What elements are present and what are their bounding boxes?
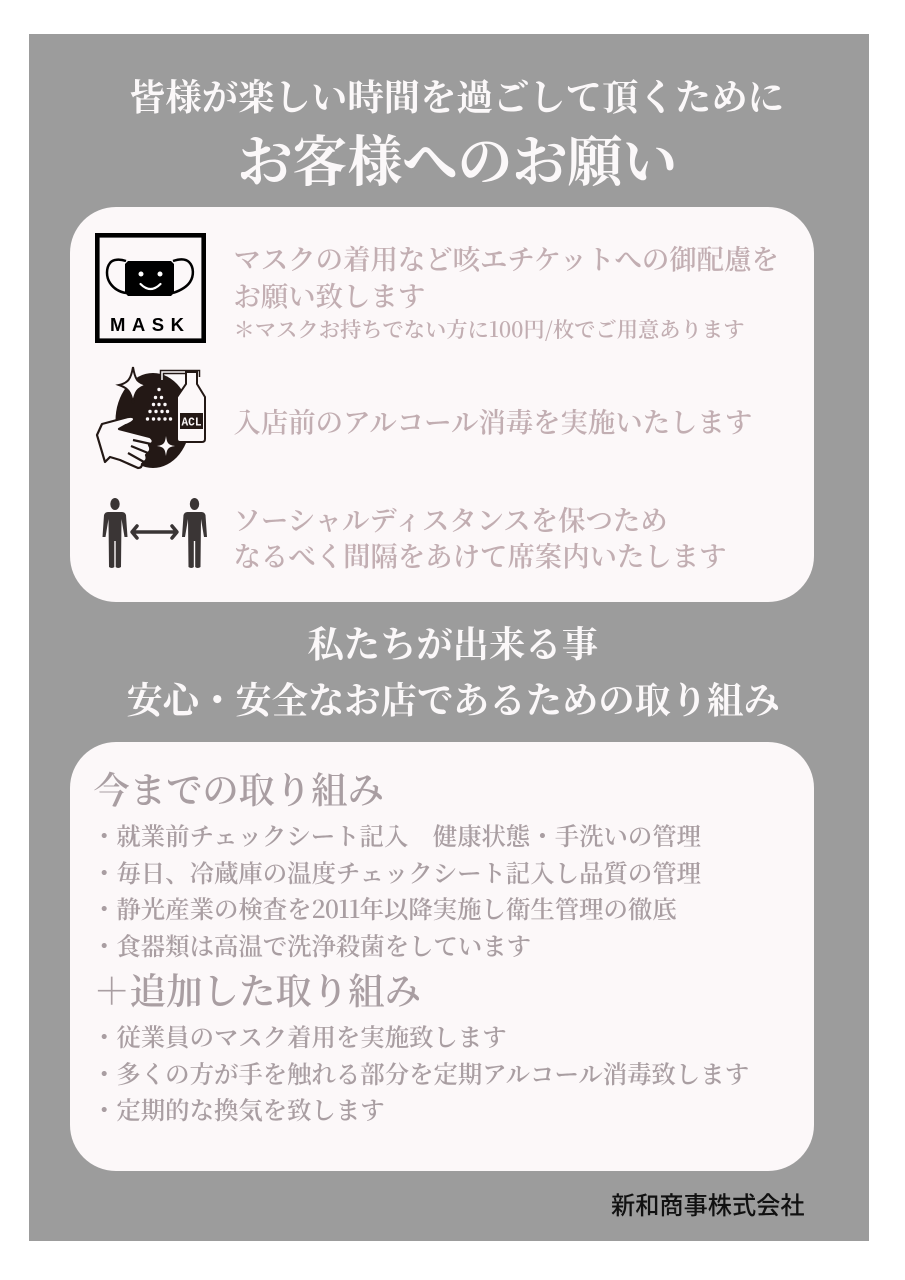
section heading: added efforts: ＋追加した取り組み — [94, 963, 421, 1015]
request text: social distance: ソーシャルディスタンスを保つため — [234, 498, 668, 538]
icon: alcohol disinfectant: ACL — [182, 416, 202, 430]
panel: efforts — [70, 742, 814, 1171]
request text: alcohol disinfection: 入店前のアルコール消毒を実施いたします — [234, 400, 752, 440]
heading: safety efforts: 安心・安全なお店であるための取り組み — [126, 672, 780, 724]
request text: social distance line 2: なるべく間隔をあけて席案内いたします — [234, 534, 727, 574]
list item: ・静光産業の検査を2011年以降実施し衛生管理の徹底 — [92, 890, 677, 925]
icon: alcohol disinfectant — [96, 366, 206, 470]
section heading: efforts so far: 今までの取り組み — [94, 762, 384, 814]
panel: customer requests — [70, 207, 814, 602]
request note: masks available: ＊マスクお持ちでない方に100円/枚でご用意あります — [234, 313, 744, 344]
title: main heading: お客様へのお願い — [238, 118, 678, 197]
request text: mask etiquette: マスクの着用など咳エチケットへの御配慮を — [234, 237, 779, 277]
icon: mask — [95, 233, 206, 343]
request text: mask etiquette line 2: お願い致します — [234, 274, 425, 314]
list item: ・従業員のマスク着用を実施致します — [92, 1018, 507, 1053]
list item: ・食器類は高温で洗浄殺菌をしています — [92, 927, 531, 962]
list item: ・毎日、冷蔵庫の温度チェックシート記入し品質の管理 — [92, 854, 701, 889]
list item: ・多くの方が手を触れる部分を定期アルコール消毒致します — [92, 1054, 749, 1090]
icon: social distancing — [102, 498, 207, 568]
list item: ・定期的な換気を致します — [92, 1091, 385, 1126]
icon: mask: MASK — [110, 314, 185, 335]
list item: ・就業前チェックシート記入 健康状態・手洗いの管理 — [92, 817, 701, 852]
title: subtitle line: 皆様が楽しい時間を過ごして頂くために — [129, 69, 784, 121]
heading: what we can do: 私たちが出来る事 — [308, 616, 598, 668]
company name: 新和商事株式会社 — [611, 1186, 805, 1221]
